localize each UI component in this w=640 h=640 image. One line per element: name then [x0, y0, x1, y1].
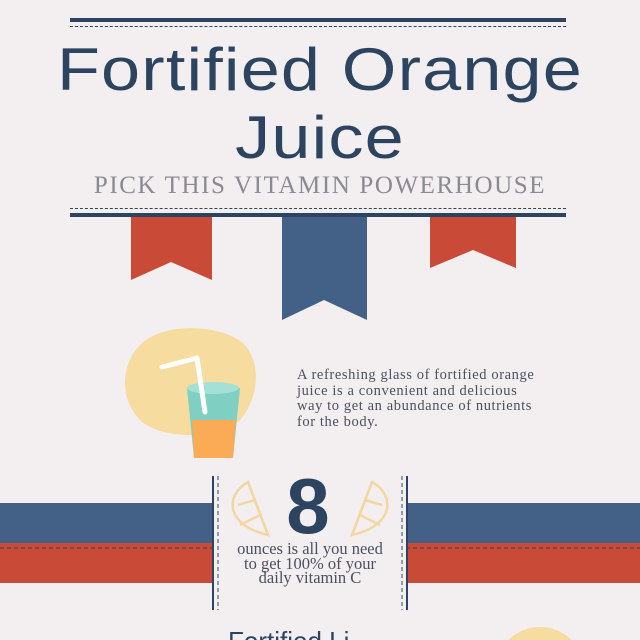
subtitle: PICK THIS VITAMIN POWERHOUSE	[94, 172, 546, 199]
stripes	[0, 503, 640, 583]
intro text: for the body.	[297, 414, 378, 430]
icon: lemon left	[233, 482, 268, 535]
stat text: ounces is all you need	[237, 539, 383, 558]
center panel	[212, 476, 408, 610]
title: Fortified Orange	[57, 36, 583, 103]
intro text	[296, 367, 534, 430]
icon: juice glass	[125, 328, 256, 458]
stat text	[237, 539, 383, 587]
stat text: to get 100% of your	[244, 554, 376, 572]
banner: center blue	[282, 217, 367, 320]
intro text: juice is a convenient and delicious	[297, 382, 517, 398]
banner: right red	[430, 217, 516, 268]
header bottom rule	[70, 208, 566, 217]
intro text: A refreshing glass of fortified orange	[297, 367, 534, 383]
intro text: way to get an abundance of nutrients	[297, 398, 532, 414]
number 8: 8	[286, 462, 330, 550]
header top rule	[70, 18, 566, 27]
stat text: daily vitamin C	[259, 568, 361, 587]
icon: lemon right	[352, 482, 387, 535]
banner: left red	[131, 217, 212, 280]
title: Juice	[235, 104, 405, 171]
bottom circle	[495, 627, 585, 640]
title	[57, 36, 583, 171]
